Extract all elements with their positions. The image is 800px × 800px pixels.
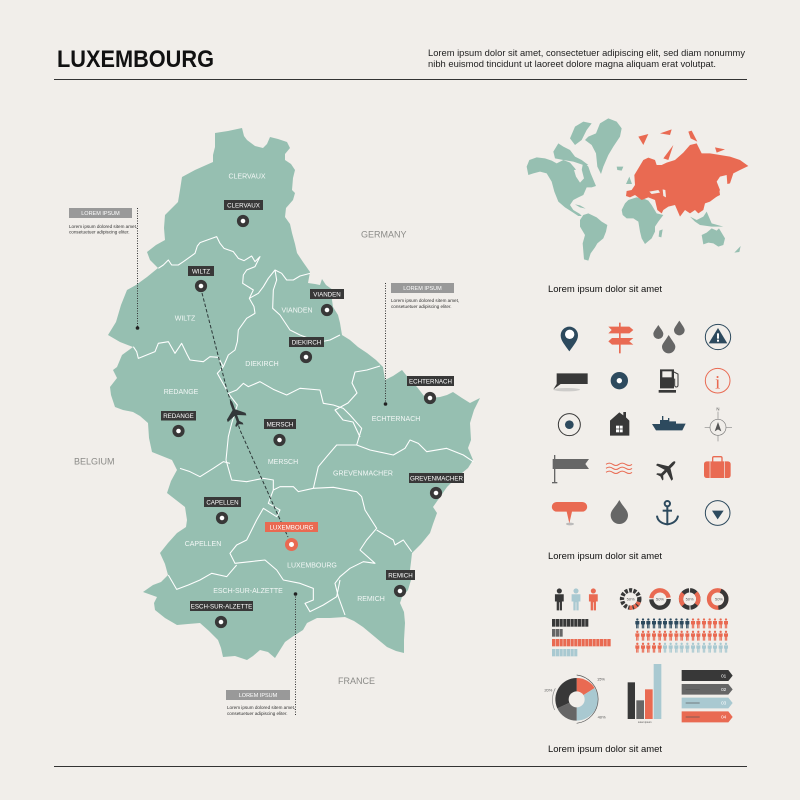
icon: water drops (653, 321, 685, 353)
percentage rings: 50% (715, 596, 723, 601)
segmented bars (552, 619, 611, 656)
numbered arrows: 04 (721, 715, 727, 720)
city markers: WILTZ (192, 268, 210, 275)
region names: ECHTERNACH (372, 416, 420, 423)
people pictogram grid (635, 618, 728, 653)
Hudson Bay (574, 169, 584, 183)
icon: location pin (561, 327, 578, 351)
callout: bottom (226, 592, 297, 716)
percentage rings: 50% (686, 596, 694, 601)
region names: REMICH (357, 596, 385, 603)
city markers: MERSCH (267, 421, 293, 428)
callout: left: LOREM IPSUM (81, 211, 120, 217)
region names: WILTZ (175, 316, 196, 322)
city markers: REMICH (388, 572, 413, 579)
callout: left: consetuetuer adipiscing eliter. (69, 230, 130, 234)
country outline (108, 128, 480, 660)
icon: down arrow (705, 501, 730, 525)
world map (527, 118, 748, 261)
icon: fuel pump (659, 369, 678, 393)
inland seas (649, 189, 666, 197)
icon: house (610, 412, 629, 436)
region borders south (168, 382, 473, 615)
icon: drop (611, 500, 628, 524)
intro text (428, 48, 745, 70)
callout: right: consetuetuer adipiscing eliter. (391, 304, 452, 309)
neighbouring country labels: GERMANY (361, 230, 407, 240)
icon: warning (705, 324, 731, 350)
city markers: CAPELLEN (206, 499, 239, 506)
city markers: GREVENMACHER (410, 475, 463, 482)
donut chart: 40% (598, 714, 606, 719)
city markers: CLERVAUX (227, 202, 260, 209)
city markers: VIANDEN (313, 291, 341, 298)
donut chart: 15% (597, 677, 605, 682)
map: Luxembourg (108, 128, 480, 660)
city markers: REDANGE (163, 413, 194, 420)
callout: left: Lorem ipsum dolored sitem amet, (69, 224, 137, 229)
callout: right: LOREM IPSUM (403, 286, 442, 292)
title: LUXEMBOURG (57, 46, 214, 73)
icon: signpost (608, 323, 633, 353)
region names: ESCH-SUR-ALZETTE (213, 588, 283, 595)
percentage rings (620, 587, 729, 611)
icon: waves (606, 463, 632, 473)
neighbouring country labels (74, 230, 407, 686)
city markers: ECHTERNACH (409, 378, 452, 385)
numbered arrows: 01 (721, 673, 727, 678)
region names: DIEKIRCH (245, 361, 279, 368)
region names: REDANGE (164, 389, 199, 396)
city markers (161, 200, 464, 626)
icon: target (558, 414, 580, 436)
infographic: charts (544, 664, 733, 724)
region names (164, 174, 420, 603)
bar chart: Lorem ipsum (638, 721, 651, 724)
callout: bottom: consetuetuer adipiscing eliter. (227, 711, 288, 716)
icon: anchor (657, 501, 678, 524)
callout: right: Lorem ipsum dolored sitem amet, (391, 298, 459, 303)
flight route (202, 293, 288, 537)
region borders north (133, 237, 340, 390)
icon: compass: N (716, 406, 720, 411)
callout: left (69, 208, 139, 330)
bar chart (628, 664, 661, 724)
region names: GREVENMACHER (333, 470, 393, 478)
numbered arrows (682, 670, 733, 722)
icon: suitcase (704, 457, 731, 478)
section heading 3: Lorem ipsum dolor sit amet (548, 744, 662, 755)
neighbouring country labels: BELGIUM (74, 456, 115, 466)
callout: bottom: LOREM IPSUM (239, 693, 278, 699)
numbered arrows: 02 (721, 687, 727, 692)
icon: info: i (715, 373, 720, 394)
intro text: Lorem ipsum dolor sit amet, consectetuer adipiscing elit, sed diam nonummy (428, 48, 745, 59)
icon: flag (552, 455, 589, 483)
percentage rings: 50% (656, 596, 664, 601)
callout: bottom: Lorem ipsum dolored sitem amet, (227, 705, 295, 710)
icon: plane (652, 454, 683, 485)
icon set (552, 321, 732, 525)
icon: donut (614, 375, 625, 386)
city markers: DIEKIRCH (292, 339, 321, 346)
section heading 2: Lorem ipsum dolor sit amet (548, 551, 662, 562)
icon: info (705, 368, 730, 394)
region border: Diekirch and Echternach (335, 366, 380, 437)
region names: MERSCH (268, 459, 298, 466)
plane icon (221, 397, 249, 429)
neighbouring country labels: FRANCE (338, 676, 375, 686)
infographic: people, rings and bars (552, 587, 729, 656)
region names: LUXEMBOURG (287, 562, 337, 570)
icon: map marker (552, 502, 587, 525)
region names: CAPELLEN (185, 541, 221, 548)
donut chart: 20% (544, 688, 553, 693)
intro text: nibh euismod tincidunt ut laoreet dolore magna aliquam erat volutpat. (428, 59, 716, 70)
city markers: LUXEMBOURG (269, 524, 314, 531)
numbered arrows: 03 (721, 701, 727, 706)
people icons (555, 588, 598, 610)
icon: compass (705, 406, 732, 441)
donut chart (544, 675, 606, 723)
region names: CLERVAUX (228, 174, 266, 180)
section heading 1: Lorem ipsum dolor sit amet (548, 284, 662, 295)
city markers: ESCH-SUR-ALZETTE (191, 603, 252, 610)
callout: right (384, 283, 459, 406)
region names: VIANDEN (281, 308, 313, 314)
icon: speech bubble (553, 373, 588, 391)
percentage rings: 50% (627, 596, 635, 601)
icon: ship (652, 416, 686, 430)
